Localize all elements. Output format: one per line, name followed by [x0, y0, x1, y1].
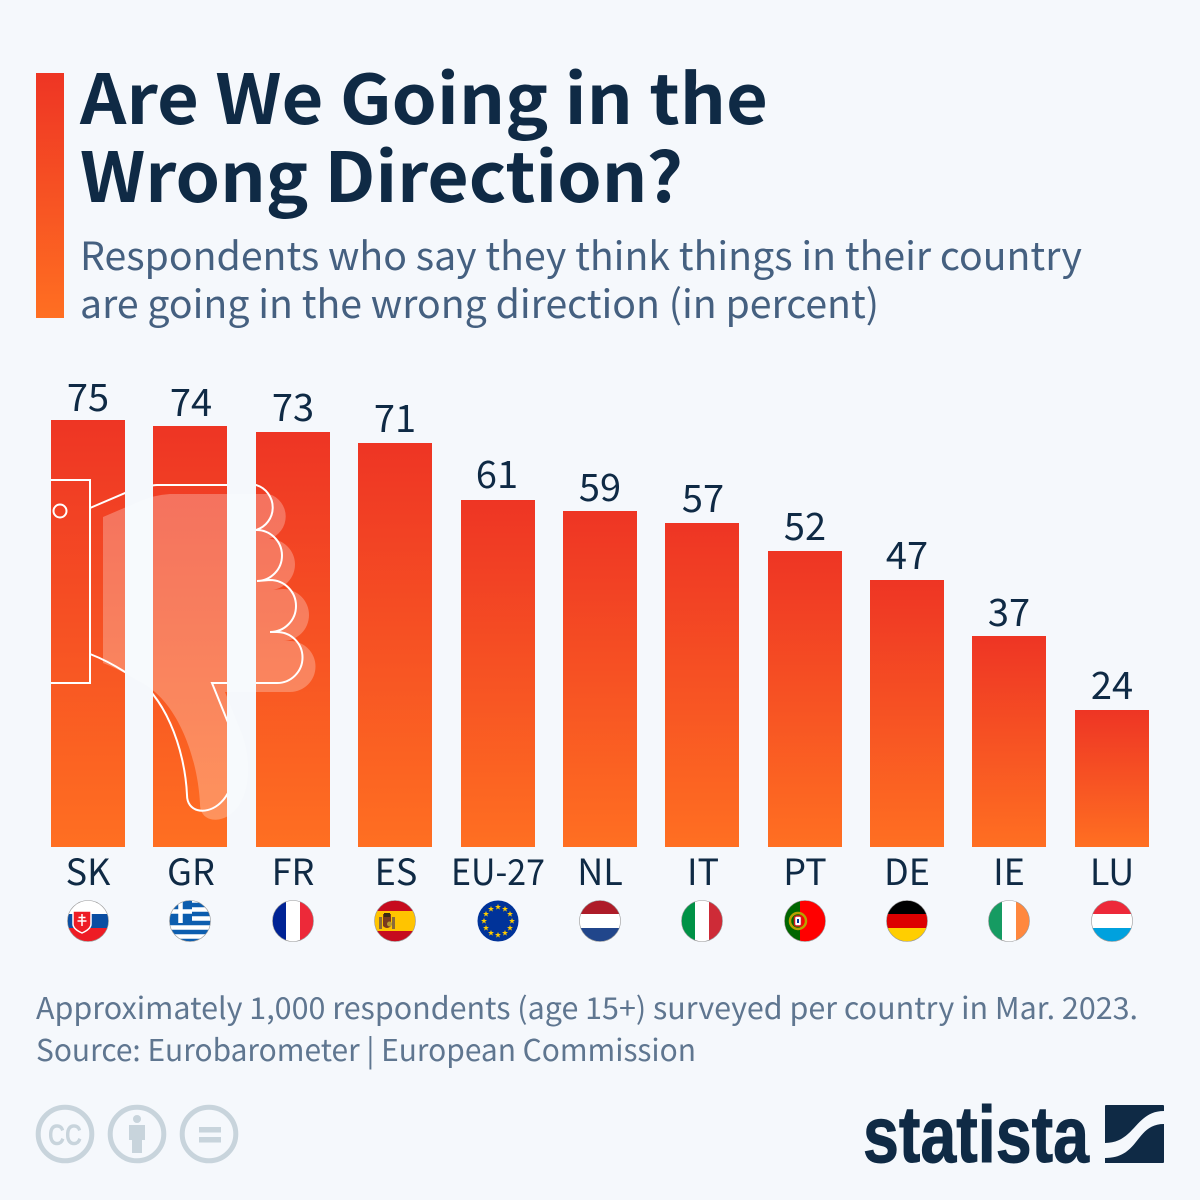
footnote and source: Approximately 1,000 respondents (age 15+) surveyed per country in Mar. 2023. — [36, 984, 1138, 1028]
statista logo mark — [1105, 1105, 1164, 1163]
bar: EU-27 61 — [461, 500, 535, 847]
title accent bar — [36, 73, 64, 318]
title: Wrong Direction? — [80, 123, 683, 222]
flag: Netherlands — [579, 900, 621, 942]
subtitle: Respondents who say they think things in their country — [80, 226, 1082, 282]
country labels: ES — [375, 844, 417, 896]
value labels: 74 — [170, 372, 212, 427]
country labels: EU-27 — [451, 844, 545, 896]
footnote and source — [36, 984, 1138, 1070]
country labels: SK — [66, 844, 111, 896]
subtitle — [80, 226, 1082, 330]
bar: PT 52 — [768, 551, 842, 847]
country labels: PT — [783, 844, 827, 896]
country labels: GR — [167, 844, 215, 896]
value labels: 52 — [784, 496, 826, 551]
bar: IE 37 — [972, 636, 1046, 847]
bar: NL 59 — [563, 511, 637, 847]
flag: Luxembourg — [1091, 900, 1133, 942]
country labels: NL — [577, 844, 623, 896]
value labels: 73 — [272, 377, 314, 432]
value labels: 24 — [1091, 655, 1133, 710]
country labels: IT — [687, 844, 719, 896]
bar: LU 24 — [1075, 710, 1149, 847]
icon: attribution — [110, 1107, 164, 1161]
thumb fill — [103, 494, 316, 820]
flag: Greece — [169, 900, 211, 942]
thumb outline — [51, 480, 302, 811]
flag: France — [272, 900, 314, 942]
flag: Spain — [374, 900, 416, 942]
title — [79, 45, 768, 222]
flag: Portugal — [784, 900, 826, 942]
flag: Italy — [681, 900, 723, 942]
bar: GR 74 — [153, 426, 227, 847]
flag: EU — [478, 900, 518, 942]
bar: SK 75 — [51, 420, 125, 847]
bar: FR 73 — [256, 432, 330, 847]
value labels: 71 — [374, 388, 416, 443]
flag: Germany — [886, 900, 928, 942]
value labels: 59 — [579, 457, 621, 512]
bar: ES 71 — [358, 443, 432, 847]
value labels: 61 — [476, 444, 518, 499]
value labels — [67, 367, 1133, 710]
bar: DE 47 — [870, 580, 944, 847]
flag: Ireland — [988, 900, 1030, 942]
title: Are We Going in the — [79, 45, 768, 144]
flag: Slovakia — [67, 900, 109, 942]
value labels: 37 — [988, 582, 1030, 637]
country labels: IE — [993, 844, 1025, 896]
icon: creative commons: CC — [48, 1119, 82, 1152]
statista wordmark: statista — [863, 1090, 1089, 1179]
footnote and source: Source: Eurobarometer | European Commission — [36, 1026, 696, 1070]
icon: creative commons — [38, 1107, 92, 1161]
subtitle: are going in the wrong direction (in percent) — [80, 274, 879, 330]
country labels — [66, 844, 1134, 896]
bar: IT 57 — [665, 523, 739, 847]
value labels: 75 — [67, 367, 109, 422]
country labels: LU — [1090, 844, 1134, 896]
icon: thumbs down — [51, 480, 316, 820]
value labels: 57 — [682, 468, 724, 523]
value labels: 47 — [886, 525, 928, 580]
bar chart — [51, 420, 1149, 847]
icon: no derivatives — [182, 1107, 236, 1161]
country labels: FR — [272, 844, 314, 896]
country labels: DE — [884, 844, 930, 896]
